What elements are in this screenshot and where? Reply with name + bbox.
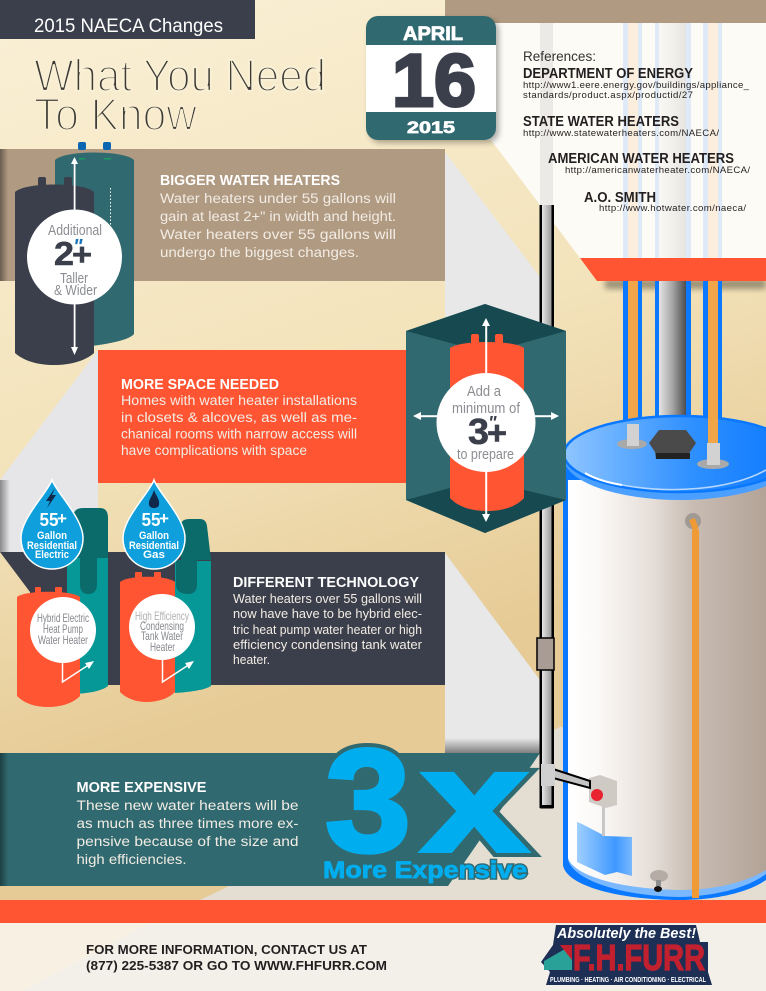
- reference: a.o. smith: [584, 190, 746, 214]
- icon: gas drop: Residential: [129, 540, 179, 552]
- reference: department of energy: DEPARTMENT OF ENERGY: [523, 66, 693, 82]
- panel: more space needed: [98, 350, 408, 483]
- callout: 3 inches to prepare: to prepare: [457, 446, 514, 463]
- callout: 2 inches taller and wider: Taller: [60, 270, 88, 287]
- graphic: 3x more expensive: 3: [325, 719, 411, 882]
- icon: electric drop: 55: [40, 510, 58, 530]
- year: 2015: [407, 118, 455, 137]
- reference: state water heaters: STATE WATER HEATERS: [523, 114, 679, 130]
- text: more expensive: MORE EXPENSIVE: [76, 780, 207, 796]
- text: different technology: Water heaters over 55 gallons will: [233, 591, 422, 606]
- arrow: hybrid heater pointer: [62, 661, 94, 682]
- logo: F.H. Furr: [541, 925, 712, 985]
- vent hood: [649, 430, 696, 459]
- icon: electric drop: +: [57, 509, 67, 528]
- callout: 3 inches to prepare: Add a: [467, 383, 502, 400]
- callout: 2 inches taller and wider: [27, 210, 122, 304]
- icon: gas drop: 55: [142, 510, 160, 530]
- tank lid: [564, 416, 766, 500]
- text: more expensive: as much as three times more ex-: [76, 816, 298, 831]
- reference: a.o. smith: http://www.hotwater.com/naeca/: [599, 203, 746, 214]
- text: more space needed: MORE SPACE NEEDED: [121, 377, 279, 393]
- logo: F.H. Furr: Absolutely the Best!: [556, 925, 696, 942]
- red banner: [580, 258, 766, 289]
- title: What You Need: [34, 50, 326, 101]
- vertical wall pipe: [537, 205, 590, 808]
- control box: [589, 775, 617, 836]
- gas tube and knob: [685, 513, 701, 898]
- icon: gas drop: [123, 480, 185, 569]
- reference: american water heaters: AMERICAN WATER HEATERS: [548, 151, 734, 167]
- text: more expensive: high efficiencies.: [76, 852, 186, 867]
- title: [34, 50, 326, 140]
- text: more expensive: These new water heaters will be: [76, 798, 298, 813]
- callout: hybrid electric heat pump: [30, 597, 96, 663]
- reference: state water heaters: http://www.statewaterheaters.com/NAECA/: [523, 128, 719, 139]
- icon: electric drop: Gallon: [37, 530, 67, 542]
- graphic: 3x more expensive: x: [421, 719, 528, 882]
- text: more expensive: [76, 780, 298, 867]
- contact text: FOR MORE INFORMATION, CONTACT US AT: [86, 942, 367, 957]
- graphic: 3x more expensive: x: [421, 719, 528, 882]
- graphic: 3x more expensive: More Expensive: [323, 857, 527, 884]
- tank body: [563, 460, 766, 900]
- callout: hybrid electric heat pump: Water Heater: [38, 633, 88, 647]
- text: bigger water heaters: gain at least 2+" in width and height.: [160, 209, 396, 224]
- callout: 3 inches to prepare: 3: [468, 411, 489, 452]
- left supply fitting: [617, 424, 647, 449]
- icon: condensing gas heater: [120, 519, 211, 702]
- title: To Know: [34, 89, 197, 140]
- arrow: height: [71, 157, 78, 355]
- graphic: 3x more expensive: [323, 719, 528, 884]
- logo: F.H. Furr: PLUMBING · HEATING · AIR CONDITIONING · ELECTRICAL: [550, 977, 707, 984]
- reference: state water heaters: [523, 114, 719, 139]
- callout: 2 inches taller and wider: & Wider: [54, 282, 97, 299]
- callout: 3 inches to prepare: [436, 373, 536, 472]
- callout: 2 inches taller and wider: Additional: [48, 222, 102, 239]
- icon: gas drop: Gallon: [139, 530, 169, 542]
- references panel: [445, 0, 766, 258]
- text: bigger water heaters: undergo the biggest changes.: [160, 245, 359, 260]
- text: bigger water heaters: BIGGER WATER HEATERS: [160, 173, 340, 189]
- panel: different technology: [0, 480, 445, 707]
- contact text: [86, 942, 387, 973]
- reference: department of energy: standards/product.aspx/productid/27: [523, 90, 693, 101]
- text: different technology: efficiency condensing tank water: [233, 637, 423, 652]
- icon: electric drop: Residential: [27, 540, 77, 552]
- text: different technology: [233, 575, 423, 667]
- callout: hybrid electric heat pump: Hybrid Electric: [37, 611, 89, 625]
- drain valve: [650, 870, 668, 892]
- header tab: [0, 0, 255, 39]
- arrow: condensing heater pointer: [162, 660, 194, 682]
- callout: 3 inches to prepare: ": [488, 413, 497, 433]
- text: more space needed: [121, 377, 357, 458]
- callout: high efficiency condensing: [129, 594, 195, 660]
- text: bigger water heaters: [160, 173, 396, 260]
- arrows: clearance: [413, 318, 559, 522]
- callout: 2 inches taller and wider: ": [73, 236, 83, 258]
- callout: 3 inches to prepare: minimum of: [452, 400, 521, 417]
- icon: dark water heater: [15, 177, 94, 365]
- text: more space needed: have complications with space: [121, 443, 307, 458]
- callout: 2 inches taller and wider: 2: [54, 235, 74, 272]
- callout: high efficiency condensing: Tank Water: [141, 629, 183, 643]
- icon: teal water heater: [55, 142, 134, 348]
- reference: department of energy: [523, 66, 750, 101]
- text: bigger water heaters: Water heaters under 55 gallons will: [160, 191, 396, 206]
- text: more space needed: chanical rooms with narrow access will: [121, 426, 357, 442]
- icon: electric drop: [21, 480, 83, 569]
- icon: alcove with heater: [406, 304, 566, 533]
- header tab: 2015 NAECA Changes: [34, 16, 223, 37]
- calendar badge: [366, 16, 499, 143]
- day: 16: [392, 39, 476, 122]
- graphic: 3x more expensive: More Expensive: [323, 857, 527, 884]
- panel: bigger water heaters: [0, 142, 445, 365]
- graphic: 3x more expensive: 3: [325, 719, 411, 882]
- callout: 3 inches to prepare: +: [487, 415, 507, 451]
- icon: hybrid electric heater: [17, 508, 108, 707]
- callout: high efficiency condensing: Heater: [150, 640, 175, 654]
- callout: hybrid electric heat pump: Heat Pump: [43, 622, 83, 636]
- text: more space needed: Homes with water heater installations: [121, 393, 357, 408]
- icon: gas drop: +: [159, 509, 169, 528]
- text: more expensive: pensive because of the size and: [76, 834, 298, 849]
- text: bigger water heaters: Water heaters over 55 gallons will: [160, 227, 396, 242]
- contact text: (877) 225-5387 OR GO TO WWW.FHFURR.COM: [86, 958, 387, 973]
- logo: F.H. Furr: F.H.FURR: [573, 937, 705, 978]
- orange heater: [450, 334, 524, 511]
- month: APRIL: [403, 24, 463, 45]
- references heading: References:: [523, 48, 596, 64]
- callout: 2 inches taller and wider: +: [72, 237, 92, 272]
- footer bar: [0, 900, 766, 923]
- blue tag: [577, 822, 632, 876]
- callout: high efficiency condensing: High Efficiency: [135, 609, 189, 623]
- water heater illustration: [563, 281, 766, 900]
- text: different technology: tric heat pump water heater or high: [233, 622, 422, 637]
- text: different technology: heater.: [233, 652, 270, 667]
- right supply pipe and fitting: [697, 281, 729, 469]
- reference: department of energy: http://www1.eere.energy.gov/buildings/appliance_: [523, 80, 750, 91]
- icon: electric drop: Electric: [35, 549, 69, 561]
- text: different technology: DIFFERENT TECHNOLOGY: [233, 575, 419, 591]
- icon: gas drop: Gas: [143, 549, 165, 561]
- text: different technology: now have have to be hybrid elec-: [233, 606, 422, 621]
- reference: american water heaters: [548, 151, 750, 176]
- vent and supply pipes: [623, 281, 722, 431]
- reference: american water heaters: http://americanwaterheater.com/NAECA/: [565, 165, 750, 176]
- panel: more expensive: [0, 719, 540, 886]
- reference: a.o. smith: A.O. SMITH: [584, 190, 656, 206]
- text: more space needed: in closets & alcoves, as well as me-: [121, 410, 357, 425]
- callout: high efficiency condensing: Condensing: [140, 619, 184, 633]
